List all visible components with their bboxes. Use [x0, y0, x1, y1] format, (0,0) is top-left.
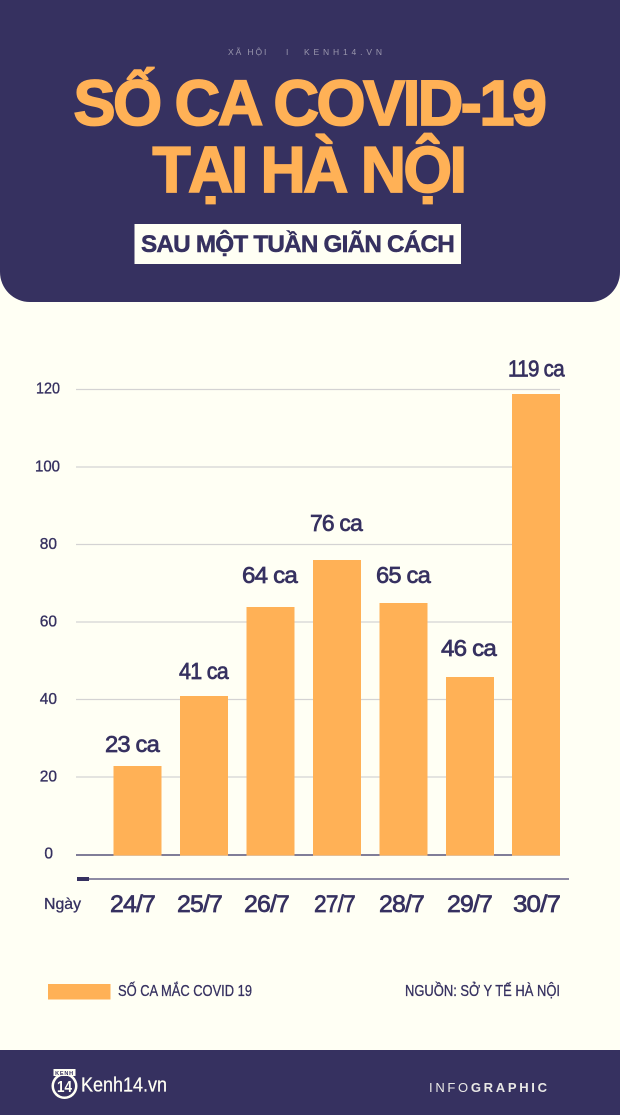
y axis labels: 80 — [40, 536, 57, 553]
y axis labels — [35, 380, 60, 862]
baseline — [76, 854, 560, 856]
date labels: 29/7 — [447, 891, 492, 918]
value labels: 64 ca — [242, 562, 299, 588]
gridlines — [76, 390, 560, 777]
infographic label: INFOGRAPHIC — [429, 1080, 548, 1095]
date labels: 25/7 — [177, 891, 222, 918]
value labels — [105, 356, 566, 757]
y axis labels: 20 — [40, 768, 57, 786]
y axis labels: 120 — [36, 380, 60, 398]
value labels: 23 ca — [105, 731, 161, 757]
date axis — [44, 877, 569, 918]
date labels: 24/7 — [110, 891, 155, 918]
icon: Kenh14 badge: KENH — [55, 1071, 74, 1077]
y axis labels: 100 — [35, 458, 60, 476]
date labels: 27/7 — [314, 891, 355, 918]
icon: Kenh14 badge — [52, 1069, 78, 1099]
axis title: Ngày — [44, 896, 81, 913]
date labels: 26/7 — [244, 891, 289, 918]
y axis labels: 0 — [44, 846, 53, 862]
y axis labels: 40 — [40, 691, 57, 708]
logo text: Kenh14.vn — [81, 1074, 167, 1096]
panel: footer — [0, 1050, 620, 1115]
icon: Kenh14 badge: 14 — [57, 1079, 72, 1096]
bar chart — [35, 356, 566, 862]
panel: header — [0, 0, 620, 302]
date labels: 28/7 — [379, 891, 424, 918]
date labels — [110, 891, 560, 918]
value labels: 41 ca — [179, 658, 230, 684]
value labels: 119 ca — [508, 356, 566, 382]
subtitle box: SAU MỘT TUẦN GIÃN CÁCH — [141, 230, 454, 258]
legend: SỐ CA MẮC COVID 19 — [118, 982, 252, 1000]
kicker site: KENH14.VN — [304, 47, 382, 57]
kicker text: XÃ HỘI — [228, 47, 268, 57]
value labels: 46 ca — [441, 635, 498, 661]
value labels: 65 ca — [376, 562, 432, 588]
y axis labels: 60 — [40, 614, 57, 630]
subtitle box — [134, 224, 461, 264]
date labels: 30/7 — [513, 891, 560, 918]
bars — [114, 394, 560, 856]
source note: NGUỒN: SỞ Y TẾ HÀ NỘI — [405, 982, 560, 1000]
kicker divider: I — [286, 47, 288, 57]
title line 1: SỐ CA COVID-19 — [74, 67, 545, 139]
title line 2: TẠI HÀ NỘI — [152, 133, 464, 206]
value labels: 76 ca — [310, 510, 364, 536]
legend — [48, 982, 252, 1000]
